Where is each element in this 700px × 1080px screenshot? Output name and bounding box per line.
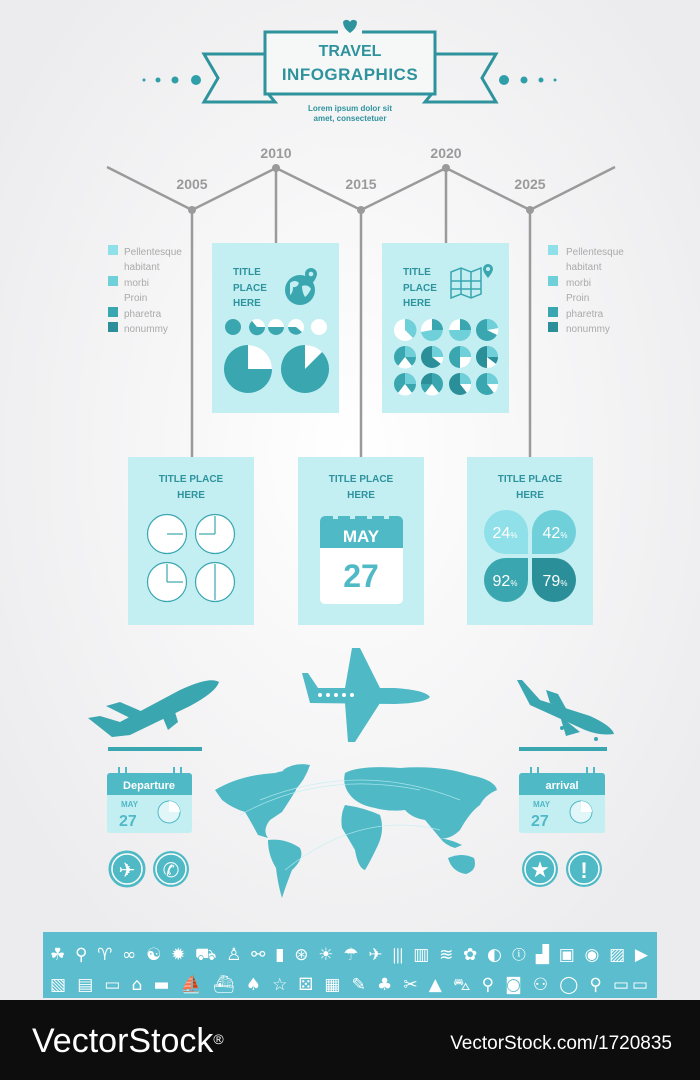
legend right <box>548 245 624 335</box>
dividers <box>108 747 202 751</box>
panel: percentages: 92% <box>493 573 517 590</box>
panel: percentages <box>467 457 593 625</box>
legend left: morbi <box>124 278 149 289</box>
legend right: Proin <box>566 293 589 304</box>
panel: clocks <box>128 457 254 625</box>
legend right: habitant <box>566 262 602 273</box>
world map <box>215 764 497 898</box>
panel: calendar: MAY <box>343 527 380 546</box>
legend left: habitant <box>124 262 160 273</box>
icon strip: ☘ ⚲ ♈ ∞ ☯ ✹ ⛟ ♙ ⚯ ▮ ⊛ ☀ ☂ ✈ ⫼ ▥ ≋ ✿ ◐ ⓘ ▟ ▣ ◉ ▨ ▶ <box>50 943 649 965</box>
legend left: nonummy <box>124 324 168 335</box>
panel: calendar: TITLE PLACE <box>329 474 394 485</box>
legend left: pharetra <box>124 309 162 320</box>
year labels: 2005 <box>176 176 208 192</box>
year labels: 2020 <box>430 145 462 161</box>
panel: clocks: HERE <box>177 490 205 501</box>
panel: calendar: 27 <box>343 558 379 594</box>
year labels: 2025 <box>514 176 546 192</box>
panel: map pies <box>382 243 509 413</box>
panel: globe pies: TITLE <box>233 267 261 278</box>
footer: VectorStock.com/1720835 <box>450 1033 672 1054</box>
title banner <box>142 20 556 102</box>
departure calendar: Departure <box>123 780 175 792</box>
title banner: INFOGRAPHICS <box>282 65 418 84</box>
legend left: Proin <box>124 293 147 304</box>
year labels <box>176 145 546 192</box>
timeline <box>107 164 615 457</box>
arrival calendar: 27 <box>531 813 549 830</box>
icon: plane takeoff <box>88 680 219 737</box>
panel: map pies: HERE <box>403 298 431 309</box>
legend left: Pellentesque <box>124 247 182 258</box>
year labels: 2015 <box>345 176 377 192</box>
panel: globe pies <box>212 243 339 413</box>
panel: percentages: 79% <box>543 573 567 590</box>
round icons: ★ <box>530 858 550 883</box>
panel: clocks: TITLE PLACE <box>159 474 224 485</box>
panel: percentages: HERE <box>516 490 544 501</box>
arrival calendar: MAY <box>533 800 551 809</box>
panel: globe pies: PLACE <box>233 283 267 294</box>
title banner: TRAVEL <box>319 43 382 60</box>
footer <box>0 1000 700 1080</box>
arrival calendar <box>519 767 605 833</box>
footer: VectorStock® <box>32 1022 224 1060</box>
icon strip <box>43 932 657 998</box>
round icons: ! <box>580 858 588 883</box>
panel: calendar <box>298 457 424 625</box>
panel: percentages: TITLE PLACE <box>498 474 563 485</box>
panel: map pies: TITLE <box>403 267 431 278</box>
departure calendar: MAY <box>121 800 139 809</box>
panel: map pies: PLACE <box>403 283 437 294</box>
panel: percentages: 42% <box>543 525 567 542</box>
departure calendar: 27 <box>119 813 137 830</box>
panel: percentages: 24% <box>493 525 517 542</box>
round icons <box>109 851 602 887</box>
year labels: 2010 <box>260 145 292 161</box>
legend right: Pellentesque <box>566 247 624 258</box>
text: amet, consectetuer <box>314 114 386 123</box>
arrival calendar: arrival <box>545 780 579 792</box>
legend left <box>108 245 182 335</box>
subtitle: Lorem ipsum dolor sit <box>308 104 392 113</box>
round icons: ✆ <box>163 858 179 882</box>
round icons: ✈ <box>119 858 135 882</box>
legend right: nonummy <box>566 324 610 335</box>
panel: calendar: HERE <box>347 490 375 501</box>
icon: plane cruise <box>302 648 430 742</box>
panel: globe pies: HERE <box>233 298 261 309</box>
icon: plane landing <box>517 680 614 741</box>
legend right: pharetra <box>566 309 604 320</box>
icon strip: ▧ ▤ ▭ ⌂ ▬ ⛵ ⛴ ♠ ☆ ⚄ ▦ ✎ ♣ ✂ ▲ ⛍ ⚲ ◙ ⚇ ◯ ⚲ ▭▭ <box>50 974 648 995</box>
departure calendar <box>107 767 192 833</box>
legend right: morbi <box>566 278 591 289</box>
